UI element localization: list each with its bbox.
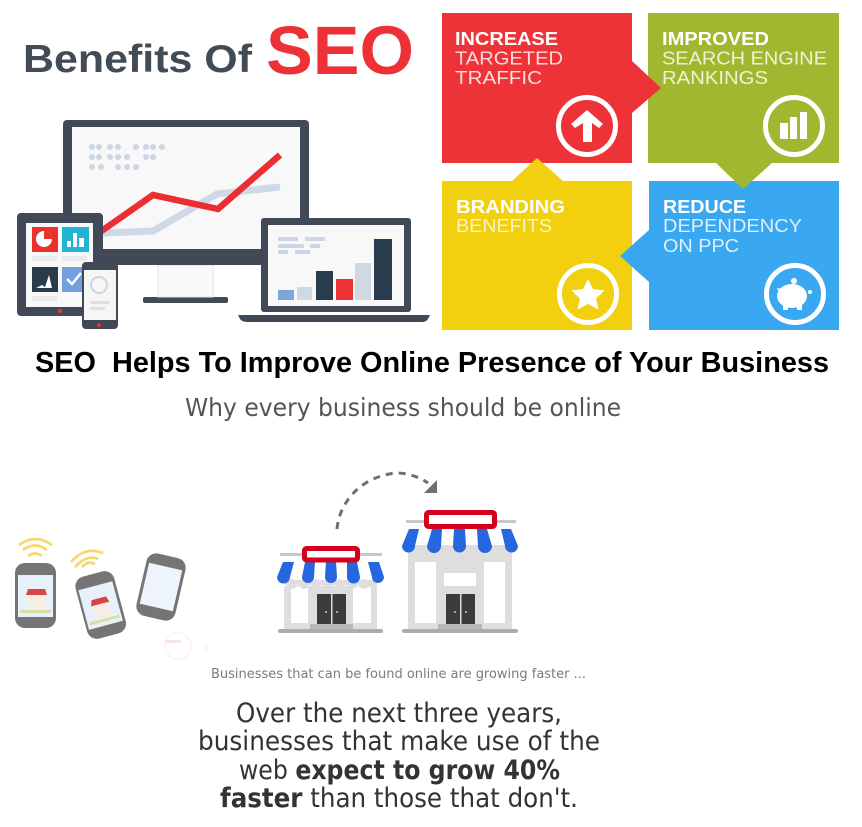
heading: online presence: SEO Helps To Improve Online Presence of Your Business	[35, 347, 829, 379]
panel: reduce dependency on PPC	[649, 181, 839, 330]
device: desktop monitor	[63, 120, 309, 303]
label	[456, 197, 565, 236]
illustration: devices showing analytics	[17, 120, 430, 329]
label: ON PPC	[663, 236, 739, 256]
device: tablet	[17, 213, 103, 316]
label: BRANDING	[456, 197, 565, 217]
label	[662, 29, 827, 88]
title: Benefits Of SEO: SEO	[266, 12, 414, 89]
label: REDUCE	[663, 197, 746, 217]
device: phone	[82, 262, 118, 329]
label: SEARCH ENGINE	[662, 48, 827, 68]
title: Benefits Of SEO: Benefits Of	[23, 38, 253, 81]
caption: Businesses that can be found online are growing faster ...	[211, 667, 586, 682]
icon: tilted phone with shop and wifi	[71, 551, 128, 641]
text block: growth statistic: Over the next three years,	[236, 698, 562, 729]
icon: blank tilted phone	[134, 551, 188, 623]
label: BENEFITS	[456, 216, 552, 236]
text block: growth statistic: web expect to grow 40%	[239, 755, 560, 786]
icon: piggy bank	[766, 266, 824, 322]
arrow: dashed growth arrow	[337, 473, 437, 529]
icon: bar chart	[766, 98, 822, 154]
panel: improved search engine rankings	[648, 13, 839, 163]
chart line: grey trend	[103, 187, 280, 233]
illustration: small storefront	[277, 548, 384, 633]
icon: up arrow	[558, 98, 616, 154]
label: TRAFFIC	[455, 68, 542, 88]
panel: increase targeted traffic	[442, 13, 632, 163]
device: laptop	[238, 218, 430, 322]
text block: growth statistic: faster than those that don't.	[220, 783, 578, 814]
text block: growth statistic: businesses that make use of the	[198, 726, 600, 757]
arrow: yellow pointer to red	[512, 158, 563, 181]
label: INCREASE	[455, 29, 558, 49]
arrow: green pointer to blue	[716, 163, 772, 189]
chart line: red trend	[100, 155, 280, 232]
text block: growth statistic	[198, 698, 600, 814]
illustration: phones with wifi	[15, 539, 208, 659]
label	[455, 29, 563, 88]
arrow: red pointer to green	[632, 61, 661, 113]
subheading: Why every business should be online	[185, 393, 621, 422]
bar chart	[278, 239, 392, 300]
illustration: large storefront	[402, 512, 518, 633]
label: TARGETED	[455, 48, 563, 68]
icon: star	[560, 266, 616, 322]
label: IMPROVED	[662, 29, 769, 49]
label: RANKINGS	[662, 68, 768, 88]
icon: phone with shop and wifi	[15, 539, 56, 628]
label	[663, 197, 802, 256]
arrow: blue pointer to yellow	[620, 230, 649, 282]
faint smudge	[165, 633, 208, 659]
label: DEPENDENCY	[663, 216, 802, 236]
panel: branding benefits	[442, 181, 632, 330]
title: Benefits Of SEO	[23, 12, 414, 89]
